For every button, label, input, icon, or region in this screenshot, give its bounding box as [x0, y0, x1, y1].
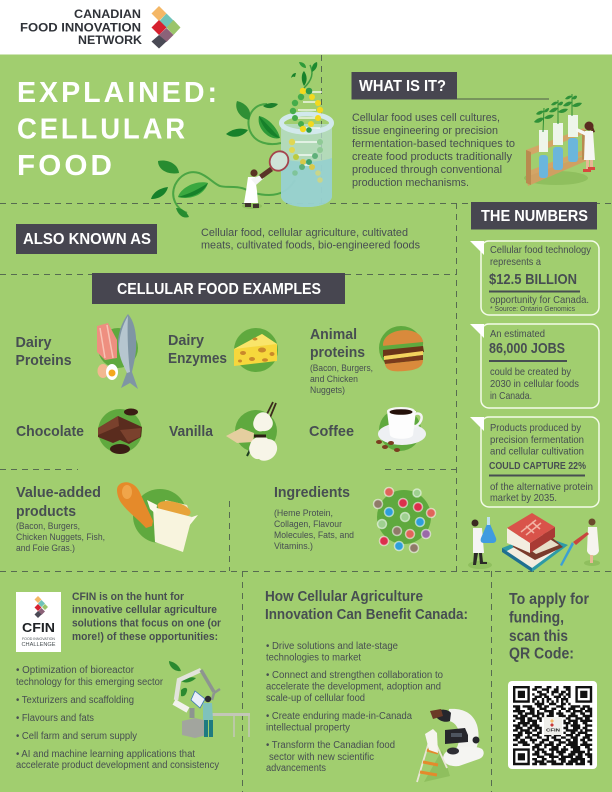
stat card: 12.5 billion: represents a — [490, 257, 541, 268]
beaker — [281, 114, 332, 207]
call to action text: scan this — [509, 628, 568, 645]
description text — [352, 112, 515, 189]
example: dairy enzymes: Enzymes — [168, 350, 227, 367]
intro text: solutions that focus on one (or — [72, 618, 222, 630]
stat card: 12.5 billion: $12.5 BILLION — [489, 271, 577, 288]
example: vanilla — [169, 402, 277, 461]
scientist with magnifying glass — [242, 148, 292, 209]
panel: what is it — [352, 72, 595, 189]
heading: examples: CELLULAR FOOD EXAMPLES — [117, 281, 321, 298]
sprout on DNA — [291, 62, 317, 88]
heading: benefits: How Cellular Agriculture — [265, 589, 423, 605]
stat card: 22 percent: market by 2035. — [490, 493, 557, 504]
bullet list: opportunities: • Texturizers and scaffolding — [16, 695, 134, 706]
example: chocolate — [16, 408, 142, 454]
synonyms text — [201, 227, 420, 252]
illustration: robot arm and worker — [169, 661, 250, 738]
call to action text: QR Code: — [509, 646, 574, 662]
example: animal proteins — [310, 326, 424, 395]
example: dairy proteins — [16, 314, 138, 389]
heading: benefits: Innovation Can Benefit Canada: — [265, 607, 468, 623]
bullet list: benefits: scale-up of cellular food — [266, 693, 365, 704]
heading: examples — [92, 273, 345, 304]
example: value-added products — [16, 482, 198, 553]
QR centre logo: CFIN — [546, 728, 560, 732]
bullet list: benefits: • Drive solutions and late-stage — [266, 641, 398, 652]
example: animal proteins: (Bacon, Burgers, — [310, 363, 373, 373]
description text: produced through conventional — [352, 164, 502, 176]
title — [17, 77, 220, 182]
badge: CFIN food innovation challenge: CHALLENGE — [22, 642, 56, 648]
illustration: scientists with books — [468, 513, 600, 572]
stat card: 86,000 jobs: could be created by — [490, 367, 572, 378]
stat card: 86,000 jobs: 2030 in cellular foods — [490, 379, 579, 390]
heading: also known as — [16, 224, 157, 254]
description text: create food products traditionally — [352, 151, 512, 163]
description text: Cellular food uses cell cultures, — [352, 112, 500, 124]
stat card: 22 percent — [470, 417, 599, 507]
bullet list: benefits: technologies to market — [266, 652, 361, 664]
logo: Canadian Food Innovation Network: FOOD INNOVATION — [20, 20, 141, 34]
title: CELLULAR — [17, 114, 188, 146]
bullet list: opportunities — [16, 665, 219, 771]
lower vine — [151, 161, 295, 218]
example: value-added products: and Foie Gras.) — [16, 543, 75, 553]
stat card: 12.5 billion: Cellular food technology — [490, 245, 592, 256]
bullet list: opportunities: technology for this emerging sector — [16, 677, 164, 688]
panel: the numbers — [468, 202, 600, 572]
synonyms text: meats, cultivated foods, bio-engineered foods — [201, 240, 420, 252]
bullet list: benefits: advancements — [266, 763, 326, 774]
example: dairy proteins: Dairy — [16, 334, 52, 351]
stat card: 22 percent: COULD CAPTURE 22% — [489, 461, 586, 472]
example: ingredients: Molecules, Fats, and — [274, 530, 354, 540]
example: dairy enzymes: Dairy — [168, 332, 205, 349]
stat card: 86,000 jobs: 86,000 JOBS — [489, 340, 565, 357]
badge: CFIN food innovation challenge — [16, 592, 61, 652]
example: dairy proteins: Proteins — [16, 352, 72, 369]
example: ingredients: Collagen, Flavour — [274, 519, 342, 529]
example: value-added products: Value-added — [16, 484, 101, 501]
badge: CFIN food innovation challenge: CFIN — [22, 620, 55, 635]
heading: what is it: WHAT IS IT? — [359, 78, 446, 95]
panel: cellular food examples — [16, 273, 436, 553]
bullet list: benefits: • Connect and strengthen collaboration to — [266, 670, 443, 681]
intro text: innovative cellular agriculture — [72, 604, 217, 616]
QR code — [508, 681, 597, 769]
bullet list: benefits: sector with new scientific — [269, 752, 374, 763]
description text: fermentation-based techniques to — [352, 138, 515, 150]
example: animal proteins: Nuggets) — [310, 385, 345, 395]
bullet list: benefits — [266, 641, 443, 774]
stat card: 12.5 billion — [470, 241, 599, 315]
description text: tissue engineering or precision — [352, 125, 498, 137]
panel: CFIN challenge opportunities — [16, 591, 250, 771]
logo: Canadian Food Innovation Network: NETWORK — [78, 33, 142, 47]
example: ingredients: (Heme Protein, — [274, 508, 333, 518]
panel: benefits for Canada — [265, 589, 484, 782]
intro text — [72, 591, 222, 643]
example: ingredients: Vitamins.) — [274, 541, 313, 551]
stat card: 12.5 billion: * Source: Ontario Genomics — [490, 306, 575, 313]
bullet list: benefits: accelerate the development, adoption and — [266, 682, 441, 692]
heading: what is it — [352, 72, 549, 100]
panel: apply for funding — [508, 591, 597, 769]
bullet list: benefits: • Create enduring made-in-Canada — [266, 711, 412, 722]
stat card: 22 percent: of the alternative protein — [490, 482, 593, 493]
example: value-added products: Chicken Nuggets, Fish, — [16, 532, 105, 542]
upper vine — [226, 101, 281, 144]
bullet list: opportunities: • Flavours and fats — [16, 713, 94, 724]
bullet list: opportunities: • Optimization of bioreactor — [16, 665, 135, 676]
call to action text — [509, 591, 589, 662]
call to action text: funding, — [509, 610, 564, 626]
example: vanilla: Vanilla — [169, 423, 214, 440]
stat card: 22 percent: and cellular cultivation — [490, 446, 584, 458]
example: coffee — [309, 407, 426, 452]
illustration: plant shelf and scientist — [524, 94, 595, 186]
example: value-added products: products — [16, 503, 76, 520]
title: FOOD — [17, 150, 115, 182]
stat card: 22 percent: Products produced by — [490, 423, 582, 434]
heading: the numbers: THE NUMBERS — [481, 208, 588, 225]
example: coffee: Coffee — [309, 423, 354, 440]
bullet list: benefits: intellectual property — [266, 722, 350, 734]
call to action text: To apply for — [509, 591, 589, 608]
example: ingredients: Ingredients — [274, 484, 350, 501]
heading: the numbers — [471, 202, 597, 230]
heading: also known as: ALSO KNOWN AS — [23, 231, 151, 248]
stat card: 12.5 billion: opportunity for Canada. — [490, 295, 589, 306]
illustration: vines, DNA beaker and scientist — [151, 62, 332, 218]
intro text: CFIN is on the hunt for — [72, 591, 185, 603]
example: dairy enzymes — [168, 328, 278, 372]
stat card: 22 percent: precision fermentation — [490, 435, 584, 446]
stat card: 86,000 jobs: in Canada. — [490, 391, 532, 402]
stat card: 86,000 jobs: An estimated — [490, 329, 545, 340]
synonyms text: Cellular food, cellular agriculture, cultivated — [201, 227, 408, 239]
example: ingredients — [274, 484, 436, 552]
panel: also known as — [16, 224, 420, 254]
example: animal proteins: Animal — [310, 326, 357, 343]
title: EXPLAINED: — [17, 77, 220, 109]
bullet list: opportunities: • AI and machine learning applications that — [16, 749, 195, 760]
logo: Canadian Food Innovation Network: CANADIAN — [74, 7, 141, 21]
badge: CFIN food innovation challenge: FOOD INNOVATION — [22, 637, 55, 641]
example: value-added products: (Bacon, Burgers, — [16, 521, 80, 531]
bullet list: benefits: • Transform the Canadian food — [266, 740, 395, 751]
stat card: 86,000 jobs — [470, 324, 599, 408]
example: chocolate: Chocolate — [16, 423, 84, 440]
example: animal proteins: and Chicken — [310, 374, 358, 384]
DNA helix — [289, 88, 323, 183]
heading: benefits — [265, 589, 468, 623]
illustration: microscope and ladder — [417, 709, 484, 782]
bullet list: opportunities: accelerate product development and consistency — [16, 760, 219, 771]
example: animal proteins: proteins — [310, 344, 365, 361]
bullet list: opportunities: • Cell farm and serum supply — [16, 731, 137, 742]
intro text: more!) of these opportunities: — [72, 631, 218, 643]
logo: Canadian Food Innovation Network — [20, 6, 180, 48]
description text: production mechanisms. — [352, 177, 469, 189]
